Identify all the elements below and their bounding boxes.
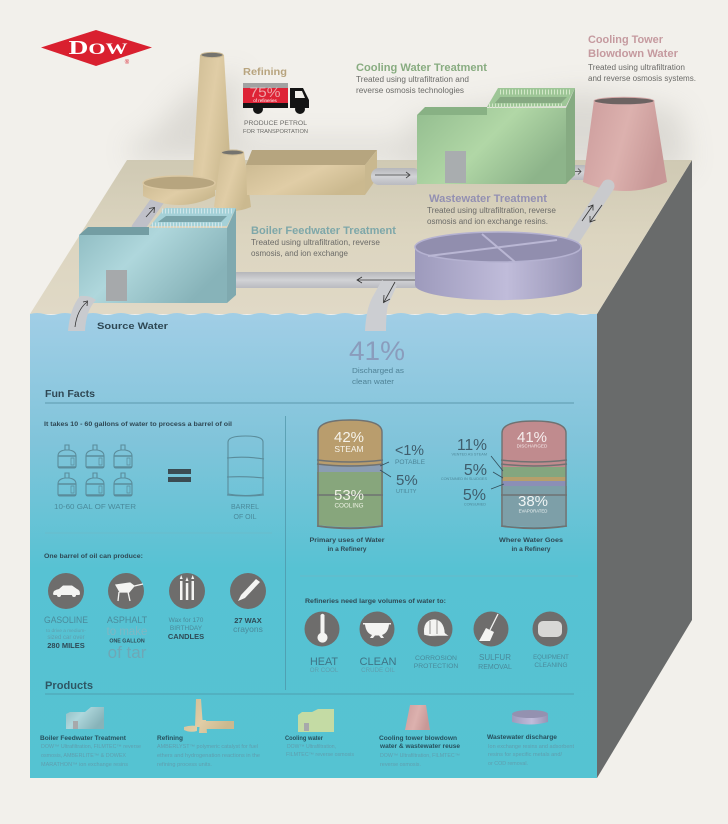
label: Refining with truck: PRODUCE PETROL: [244, 120, 307, 127]
stat: 41% discharged: Discharged as: [352, 366, 404, 375]
text: sulfur removal: [478, 653, 512, 671]
text: candles: [168, 617, 204, 641]
pipe: refining to cooling: [371, 168, 421, 185]
chart: where water goes barrel: Where Water Goes: [499, 537, 563, 544]
text: gasoline: to drive a medium-: [46, 628, 86, 634]
label: Cooling Tower Blowdown Water: and reverse osmosis systems.: [588, 74, 696, 83]
heading: Products: Products: [45, 680, 93, 692]
text: asphalt: of tar: [108, 643, 147, 662]
text: heat or cool: OR COOL: [310, 667, 339, 674]
product: refining: Refining: [157, 735, 183, 742]
side face of block: [597, 160, 692, 778]
text: asphalt: to make: [107, 626, 147, 638]
chart: primary uses of water barrel: COOLING: [334, 502, 364, 510]
refinery: long box: [246, 150, 377, 195]
text: clean crude oil: [360, 656, 397, 674]
icon: mini refinery: [184, 699, 234, 733]
product: wastewater: [487, 710, 575, 767]
label: Boiler Feedwater Treatment: Boiler Feedwater Treatment: [251, 225, 396, 237]
water front panel: [30, 313, 597, 778]
text: heat or cool: HEAT: [310, 656, 338, 668]
label: Wastewater Treatment: [427, 193, 557, 226]
text: asphalt: ONE GALLON: [109, 638, 145, 644]
product: wastewater: resins for specific metals and/: [488, 752, 563, 758]
logo: Dow: D OW: [68, 37, 128, 59]
icon: thermometer: [304, 612, 340, 646]
product: cooling tower: reverse osmosis.: [380, 762, 421, 768]
icon: water jugs: [58, 445, 132, 496]
label: Wastewater Treatment: osmosis and ion exchange resins.: [427, 217, 548, 226]
panel: gallons equal a barrel: 10-60 GAL OF WATER: [54, 502, 137, 511]
product: refining: ethers and hydrogenation reactions in the: [157, 753, 260, 759]
product: cooling water: Cooling water: [285, 735, 324, 742]
product: refining: [157, 699, 260, 768]
product: boiler feedwater: Boiler Feedwater Treatment: [40, 735, 126, 742]
refinery: round tank: [143, 176, 215, 205]
label: Cooling Water Treatment: reverse osmosis technologies: [356, 86, 464, 95]
building: boiler feedwater treatment: [79, 208, 236, 303]
text: asphalt: [107, 615, 148, 662]
text: equipment cleaning: EQUIPMENT: [533, 655, 569, 661]
label: Wastewater Treatment: Wastewater Treatment: [429, 193, 547, 205]
label: Cooling Tower Blowdown Water: [588, 34, 696, 83]
text: candles: BIRTHDAY: [170, 625, 203, 632]
text: crayons: [233, 616, 263, 634]
text: gasoline: [44, 615, 88, 650]
label: Refining with truck: Refining: [243, 66, 287, 78]
chart: where water goes barrel: 38%: [518, 493, 548, 510]
label: Cooling Tower Blowdown Water: Cooling Tower: [588, 34, 664, 46]
panel: gallons equal a barrel: OF OIL: [234, 514, 257, 521]
panel: one barrel can produce: One barrel of oil can produce:: [44, 553, 143, 560]
logo: Dow: ®: [125, 59, 130, 66]
cooling tower: [583, 97, 667, 191]
icon: car: [48, 573, 84, 609]
stat: 41% discharged: clean water: [352, 377, 395, 386]
logo: Dow: [41, 30, 152, 66]
label: Cooling Water Treatment: Cooling Water Treatment: [356, 62, 487, 74]
label: Wastewater Treatment: Treated using ultrafiltration, reverse: [427, 206, 557, 215]
chart: where water goes barrel: 41%: [517, 429, 547, 446]
text: heat or cool: [310, 656, 339, 674]
text: gasoline: sized car over: [47, 635, 85, 641]
icon: crayon: [230, 573, 266, 609]
text: equipment cleaning: CLEANING: [534, 662, 568, 669]
chart: where water goes barrel: 5%: [463, 487, 486, 504]
label: Boiler Feedwater Treatment: [251, 225, 396, 258]
text: corrosion protection: CORROSION: [415, 655, 457, 662]
chart: where water goes barrel: EVAPORATED: [519, 508, 547, 514]
panel: gallons equal a barrel: It takes 10 - 60 gallons of water to process a barrel of oil: [44, 421, 232, 428]
chart: where water goes barrel: VENTED AS STEAM: [452, 452, 487, 456]
product: refining: AMBERLYST™ polymeric catalyst for fuel: [157, 744, 258, 750]
text: sulfur removal: REMOVAL: [478, 664, 512, 671]
chart: where water goes barrel: CONTAINED IN SLUDGES: [441, 477, 487, 481]
chart: where water goes barrel: DISCHARGED: [517, 444, 548, 448]
text: asphalt: ASPHALT: [107, 615, 148, 625]
chart: where water goes barrel: [441, 421, 567, 553]
product: boiler feedwater: osmosis, AMBERLITE™ & DOWEX: [41, 753, 127, 759]
chart: where water goes barrel: 5%: [464, 462, 487, 479]
panel: refineries need water: Refineries need large volumes of water to:: [305, 598, 446, 605]
icon: mini green building: [298, 709, 334, 732]
label: Cooling Water Treatment: [356, 62, 487, 95]
divider: [284, 416, 286, 690]
product: cooling tower: [379, 705, 461, 768]
pipe: source water: [68, 296, 96, 331]
product: wastewater: Ion exchange resins and adsorbent: [488, 744, 575, 750]
text: candles: Wax for 170: [169, 617, 204, 624]
building: cooling water treatment: [417, 88, 575, 184]
stat: 41% discharged: 41%: [349, 336, 405, 366]
product: refining: refining process units.: [157, 762, 212, 768]
text: sulfur removal: SULFUR: [479, 653, 511, 662]
product: boiler feedwater: [40, 707, 141, 768]
icon: candles: [169, 573, 205, 609]
label: Boiler Feedwater Treatment: Treated using ultrafiltration, reverse: [251, 238, 381, 247]
label: Refining with truck: FOR TRANSPORTATION: [243, 129, 308, 135]
product: cooling tower: water & wastewater reuse: [379, 743, 461, 750]
chart: primary uses of water barrel: 5%: [396, 472, 418, 489]
product: wastewater: or COD removal.: [488, 761, 528, 767]
panel: refineries need water: [304, 598, 569, 674]
text: crayons: crayons: [233, 624, 263, 634]
chart: primary uses of water barrel: in a Refinery: [327, 546, 367, 553]
icon: equals sign: [168, 469, 191, 482]
panel: gallons equal a barrel: BARREL: [231, 504, 259, 511]
refinery: tall chimney: [192, 52, 232, 190]
product: cooling tower: Cooling tower blowdown: [379, 735, 457, 742]
chart: primary uses of water barrel: <1%: [395, 442, 424, 459]
text: gasoline: GASOLINE: [44, 615, 88, 625]
product: cooling water: DOW™ Ultrafiltration,: [287, 744, 336, 750]
chart: where water goes barrel: in a Refinery: [511, 546, 551, 553]
chart: primary uses of water barrel: Primary uses of Water: [310, 537, 385, 544]
icon: shovel: [474, 612, 508, 646]
pipe: boiler to refining: [138, 200, 158, 228]
pipe: tower to wastewater: [573, 186, 608, 240]
heading: Fun Facts: Fun Facts: [45, 388, 95, 400]
chart: primary uses of water barrel: 53%: [334, 487, 364, 504]
product: boiler feedwater: DOW™ Ultrafiltration, FILMTEC™ reverse: [41, 744, 141, 750]
product: cooling tower: DOW™ Ultrafiltration, FILMTEC™: [380, 753, 460, 759]
product: boiler feedwater: MARATHON™ ion exchange resins: [41, 762, 129, 768]
product: wastewater: Wastewater discharge: [487, 734, 558, 741]
icon: bathtub: [360, 612, 394, 646]
panel: one barrel can produce: [44, 553, 266, 662]
label: Boiler Feedwater Treatment: osmosis, and ion exchange: [251, 249, 349, 258]
icon: mini tank: [512, 715, 548, 724]
text: gasoline: 280 MILES: [47, 641, 85, 650]
pipe: discharge: [365, 280, 397, 331]
pipe: boiler feed arrow: [146, 208, 154, 217]
label: Refining with truck: 75%: [250, 84, 280, 100]
icon: mini teal building: [66, 707, 104, 729]
label: Cooling Tower Blowdown Water: Blowdown Water: [588, 48, 679, 60]
icon: sponge: [532, 612, 568, 646]
chart: primary uses of water barrel: [310, 420, 425, 553]
stat: 41% discharged: [349, 336, 405, 386]
text: equipment cleaning: [533, 655, 569, 669]
text: clean crude oil: CLEAN: [360, 656, 397, 668]
text: clean crude oil: CRUDE OIL: [361, 667, 395, 674]
panel: gallons equal a barrel: [44, 421, 264, 521]
icon: hard hat: [418, 612, 452, 646]
text: crayons: 27 WAX: [234, 616, 262, 625]
label: Cooling Water Treatment: Treated using ultrafiltration and: [356, 75, 469, 84]
label: Cooling Tower Blowdown Water: Treated using ultrafiltration: [588, 63, 685, 72]
chart: primary uses of water barrel: POTABLE: [395, 459, 425, 466]
label: Refining with truck: [243, 66, 309, 135]
chart: where water goes barrel: CONSUMED: [464, 502, 486, 506]
soft shadow behind plant: [130, 70, 690, 170]
pipe: cooling to tower: [566, 165, 590, 180]
text: corrosion protection: PROTECTION: [414, 663, 458, 670]
wastewater tank: [415, 232, 582, 300]
chart: where water goes barrel: 11%: [457, 437, 487, 454]
icon: mini tower: [405, 705, 430, 730]
chart: primary uses of water barrel: 42%: [334, 429, 364, 446]
icon: wheelbarrow of asphalt: [108, 573, 144, 609]
product: cooling water: FILMTEC™ reverse osmosis: [286, 752, 355, 758]
product: cooling water: [285, 709, 355, 758]
chart: primary uses of water barrel: STEAM: [334, 444, 364, 454]
pipe: wastewater to boiler: [229, 272, 424, 288]
refinery: small cone: [214, 150, 251, 211]
icon: barrel outline: [227, 436, 264, 496]
label: Refining with truck: of refineries: [253, 98, 278, 103]
text: candles: CANDLES: [168, 632, 204, 641]
top surface of block: [30, 160, 692, 314]
label: Source Water: Source Water: [97, 321, 168, 332]
text: corrosion protection: [414, 655, 458, 670]
chart: primary uses of water barrel: UTILITY: [396, 489, 417, 495]
